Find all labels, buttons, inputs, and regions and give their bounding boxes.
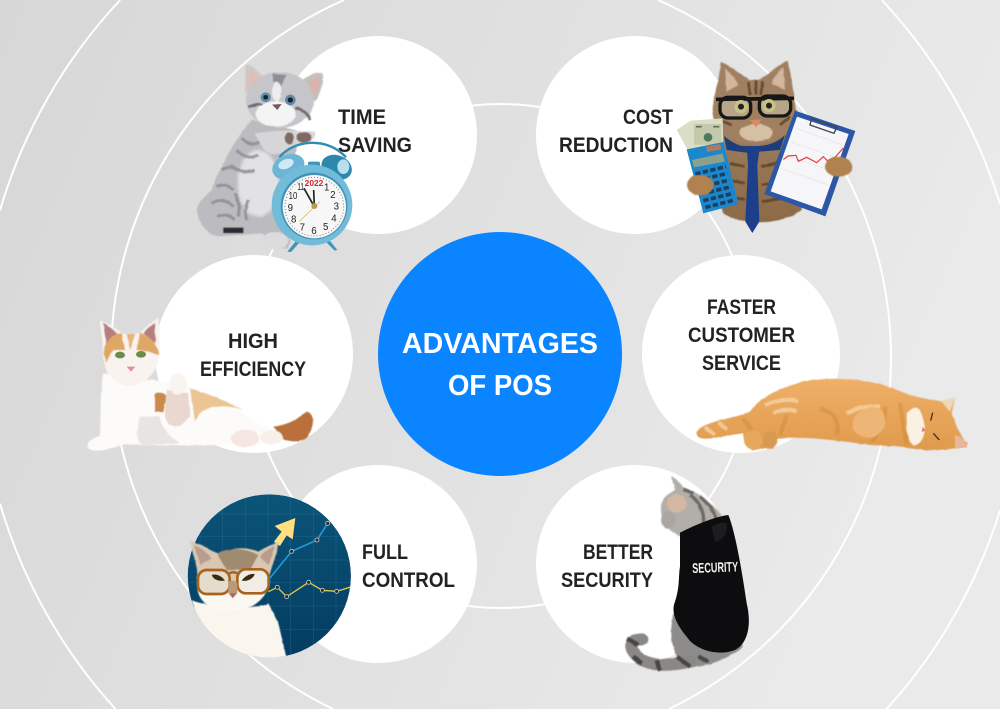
icon: alarm clock: 3 xyxy=(334,201,339,212)
panel: cost reduction: REDUCTION xyxy=(559,134,673,157)
icon: calculator xyxy=(687,142,738,213)
icon: white and orange cat lying down xyxy=(87,318,313,451)
icon: alarm clock: 10 xyxy=(289,191,297,202)
panel: better security: BETTER xyxy=(583,541,653,564)
panel: faster customer service: FASTER xyxy=(707,296,776,319)
icon: alarm clock: 5 xyxy=(323,222,328,233)
icon: alarm clock: 8 xyxy=(291,214,296,225)
security label: SECURITY xyxy=(692,558,739,576)
icon: sleeping orange cat xyxy=(697,379,967,450)
panel: faster customer service xyxy=(642,255,840,453)
center circle: advantages of POS xyxy=(378,232,622,476)
icon: alarm clock: 9 xyxy=(288,203,293,214)
panel: time saving xyxy=(279,36,477,234)
icon: alarm clock: 2 xyxy=(330,190,336,201)
icon: cat with glasses in front of chart circle xyxy=(187,493,353,658)
icon: alarm clock: 11 xyxy=(297,182,304,193)
panel: full control xyxy=(279,465,477,663)
center circle: advantages of POS: OF POS xyxy=(448,370,552,402)
icon: alarm clock: 4 xyxy=(331,213,337,224)
panel: cost reduction: COST xyxy=(623,106,673,129)
icon: alarm clock: 7 xyxy=(300,222,305,233)
panel: time saving: TIME xyxy=(338,106,386,129)
icon: kitten with alarm clock xyxy=(196,65,356,252)
panel: time saving: SAVING xyxy=(338,134,412,157)
panel: better security xyxy=(536,465,734,663)
panel: high efficiency: HIGH xyxy=(228,330,278,353)
panel: faster customer service: SERVICE xyxy=(702,352,781,375)
icon: cat with glasses, calculator and clipboard xyxy=(677,61,855,233)
panel: high efficiency: EFFICIENCY xyxy=(200,358,306,381)
panel: high efficiency xyxy=(155,255,353,453)
icon: cat in black security hoodie xyxy=(627,476,749,671)
icon: alarm clock: 2022 xyxy=(305,178,324,188)
panel: better security: SECURITY xyxy=(561,569,653,592)
icon: clipboard with chart xyxy=(764,111,855,216)
center circle: advantages of POS: ADVANTAGES xyxy=(402,328,598,360)
panel: full control: CONTROL xyxy=(362,569,455,592)
panel: full control: FULL xyxy=(362,541,408,564)
icon: rising yellow arrow xyxy=(274,518,295,546)
icon: banknotes xyxy=(677,118,723,152)
icon: alarm clock xyxy=(268,143,356,252)
panel: cost reduction xyxy=(536,36,734,234)
panel: faster customer service: CUSTOMER xyxy=(688,324,795,347)
icon: alarm clock: 6 xyxy=(311,226,317,237)
icon: alarm clock: 1 xyxy=(324,183,329,194)
